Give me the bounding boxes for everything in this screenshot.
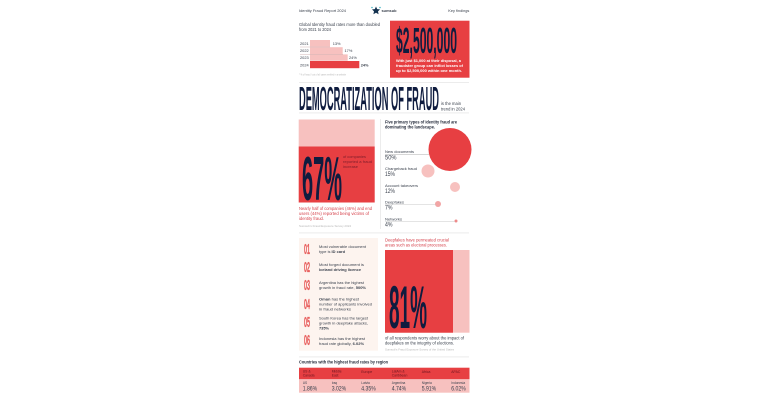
panel: key facts list: 04: [304, 296, 310, 313]
panel: key facts list: fraud rate globally, 6.02%: [319, 341, 364, 346]
panel: key facts list: 01: [304, 241, 310, 258]
bar chart: * % of fraud / out of all cases verified in a website: [299, 72, 346, 76]
table: regions: LatAm &: [392, 370, 405, 374]
bar chart: 13%: [333, 41, 341, 46]
table: regions: Caribbean: [392, 374, 407, 378]
table: regions: 4.74%: [392, 386, 407, 392]
table: regions: Latvia: [361, 381, 370, 385]
panel: primary fraud types: 4%: [385, 222, 393, 228]
table: regions: Canada: [303, 374, 315, 378]
subtitle: [299, 22, 380, 32]
callout: $2,500,000: up to $2,500,000 within one month.: [396, 68, 462, 73]
callout: $2,500,000: [390, 20, 470, 78]
panel: primary fraud types: dominating the landscape.: [385, 124, 435, 130]
panel: primary fraud types: New documents: [385, 149, 414, 154]
panel: primary fraud types: Chargeback fraud: [385, 166, 417, 171]
table: regions: US: [303, 381, 307, 385]
panel: primary fraud types: 15%: [385, 172, 396, 178]
table: regions: Nigeria: [422, 381, 432, 385]
table: regions: 4.35%: [361, 386, 376, 392]
panel: key facts list: Most vulnerable document: [319, 244, 367, 249]
table: regions: East: [332, 374, 339, 378]
table: regions: Argentina: [392, 381, 406, 385]
table: regions: 1.86%: [303, 386, 318, 392]
text block: victims of fraud: [299, 206, 373, 221]
panel: 67 percent: 67%: [302, 145, 342, 214]
table: regions: US &: [303, 370, 311, 374]
bar chart: 2021: [300, 41, 309, 46]
bar chart: 17%: [344, 48, 353, 53]
panel: key facts list: type is ID card: [319, 249, 346, 254]
panel: primary fraud types: 50%: [385, 156, 397, 162]
title note: is the main: [441, 101, 462, 106]
title note: trend in 2024: [441, 106, 466, 112]
panel: primary fraud types: Five primary types of identity fraud are: [385, 120, 458, 124]
table: regions: Africa: [422, 370, 430, 374]
panel: key facts list: 03: [304, 277, 310, 294]
panel: key facts list: Oman has the highest: [319, 296, 360, 302]
panel: 67 percent: increase: [343, 164, 359, 169]
panel: 67 percent: of companies: [343, 154, 366, 159]
logo: sumsub: [382, 8, 397, 13]
panel: key facts list: Most forged document is: [319, 262, 364, 267]
panel: key facts list: growth in fraud rate, 500%: [319, 285, 366, 290]
table: regions: Middle: [332, 370, 342, 374]
source: Sumsub's Fraud Exposure Survey 2024: [299, 224, 351, 228]
header: [299, 8, 469, 13]
panel: key facts list: in fraud networks: [319, 306, 351, 312]
panel: key facts list: growth in deepfake attacks,: [319, 320, 368, 326]
table: regions: 3.02%: [332, 386, 347, 392]
panel: key facts list: Argentina has the highest: [319, 280, 365, 285]
panel: 81 percent: [385, 250, 470, 341]
panel: 67 percent: reported a fraud: [343, 159, 372, 164]
text block: victims of fraud: identity fraud.: [299, 216, 324, 221]
callout: $2,500,000: fraudster group can inflict losses of: [396, 63, 464, 68]
text block: deepfakes heading: areas such as electoral processes.: [385, 242, 447, 248]
panel: key facts list: 06: [304, 332, 310, 349]
bar chart: 2022: [300, 48, 309, 53]
source: Sumsub's Fraud Exposure Survey of the United States: [385, 348, 455, 352]
panel: primary fraud types: 7%: [385, 206, 393, 212]
table: regions: 6.02%: [451, 386, 466, 392]
panel: key facts list: 02: [304, 259, 310, 276]
title note: [441, 101, 466, 112]
panel: key facts list: number of applicants involved: [319, 302, 372, 306]
panel: primary fraud types: [385, 120, 472, 228]
subtitle: Global Identity fraud rates more than doubled: [299, 22, 380, 27]
panel: key facts list: 735%: [319, 326, 329, 330]
bar chart: [299, 40, 369, 76]
table: regions: [299, 368, 470, 393]
bar chart: 24%: [349, 55, 357, 60]
bar chart: 2024: [300, 62, 309, 67]
text block: victims of fraud: Nearly half of companies (46%) and end: [299, 206, 373, 211]
panel: 67 percent: [299, 120, 375, 214]
panel: primary fraud types: 12%: [385, 189, 396, 195]
bar chart: 2023: [300, 55, 309, 60]
table: regions: Europe: [361, 370, 372, 374]
table: regions: Indonesia: [451, 381, 465, 385]
text block: respondents: deepfakes on the integrity of elections.: [385, 340, 454, 346]
text block: respondents: [385, 336, 465, 346]
logo: [371, 6, 397, 14]
text block: deepfakes heading: Deepfakes have permeated crucial: [385, 238, 449, 242]
panel: key facts list: South Korea has the largest: [319, 316, 369, 320]
text block: respondents: of all respondents worry about the impact of: [385, 336, 465, 340]
panel: 81 percent: 81%: [389, 274, 427, 341]
table heading: Countries with the highest fraud rates by region: [299, 360, 388, 364]
panel: primary fraud types: Networks: [385, 216, 402, 222]
table: regions: 5.91%: [422, 386, 437, 392]
text: $2,500,000: [396, 20, 457, 61]
table: regions: Iraq: [332, 381, 337, 385]
panel: primary fraud types: Deepfakes: [385, 200, 404, 204]
subtitle: from 2021 to 2024: [299, 27, 331, 32]
panel: primary fraud types: Account takeovers: [385, 183, 418, 188]
header: Identity Fraud Report 2024: [299, 8, 347, 13]
callout: $2,500,000: With just $1,000 at their disposal, a: [396, 58, 462, 63]
header: Key findings: [448, 8, 469, 13]
panel: key facts list: [299, 238, 378, 351]
panel: key facts list: 05: [304, 314, 310, 331]
bar chart: 24%: [361, 62, 369, 67]
text block: victims of fraud: users (44%) reported being victims of: [299, 211, 370, 216]
panel: key facts list: Indonesia has the highest: [319, 336, 366, 341]
table: regions: APAC: [451, 370, 461, 374]
text block: deepfakes heading: [385, 238, 449, 248]
panel: key facts list: Iceland driving licence: [319, 267, 362, 272]
